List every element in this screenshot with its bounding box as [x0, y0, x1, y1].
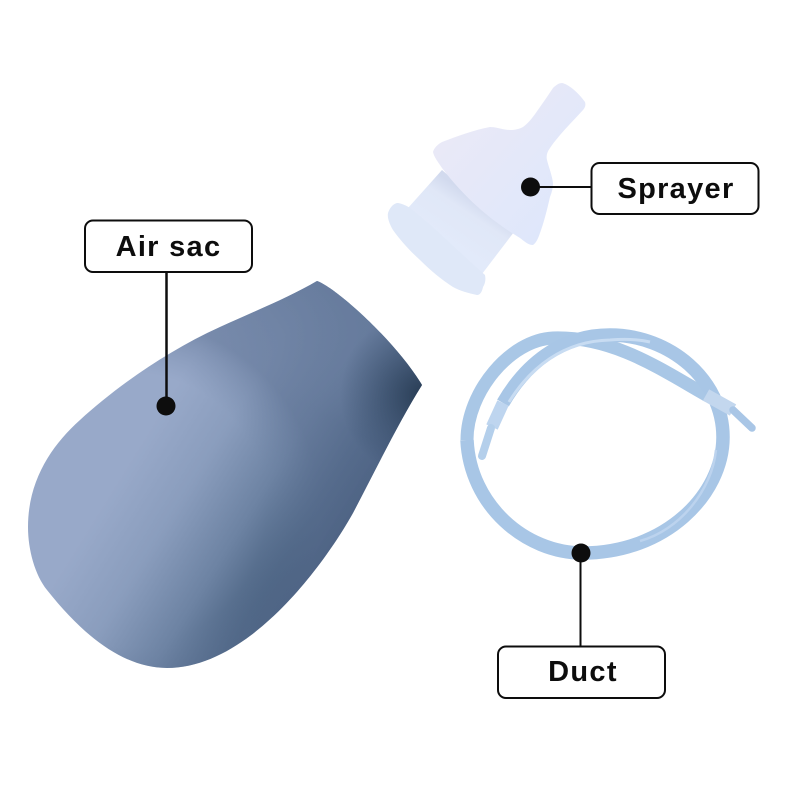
duct tube [467, 335, 752, 553]
sprayer cone and tip [433, 83, 585, 245]
callout: Duct [498, 544, 665, 698]
air sac bulb [20, 270, 430, 680]
sprayer nozzle [388, 83, 585, 295]
duct main loop [467, 335, 723, 553]
duct tip left [492, 403, 503, 427]
sprayer base flange [388, 203, 485, 295]
callout: Air sac: Air sac [116, 231, 221, 263]
callout: Air sac [85, 220, 252, 416]
sprayer lower body [408, 170, 514, 274]
callout: Duct: Duct [548, 656, 618, 688]
callout: Sprayer [521, 163, 758, 214]
duct tip right [706, 395, 733, 410]
callout: Sprayer: Sprayer [617, 173, 735, 205]
duct back strand [467, 338, 708, 440]
duct highlight [509, 339, 650, 402]
